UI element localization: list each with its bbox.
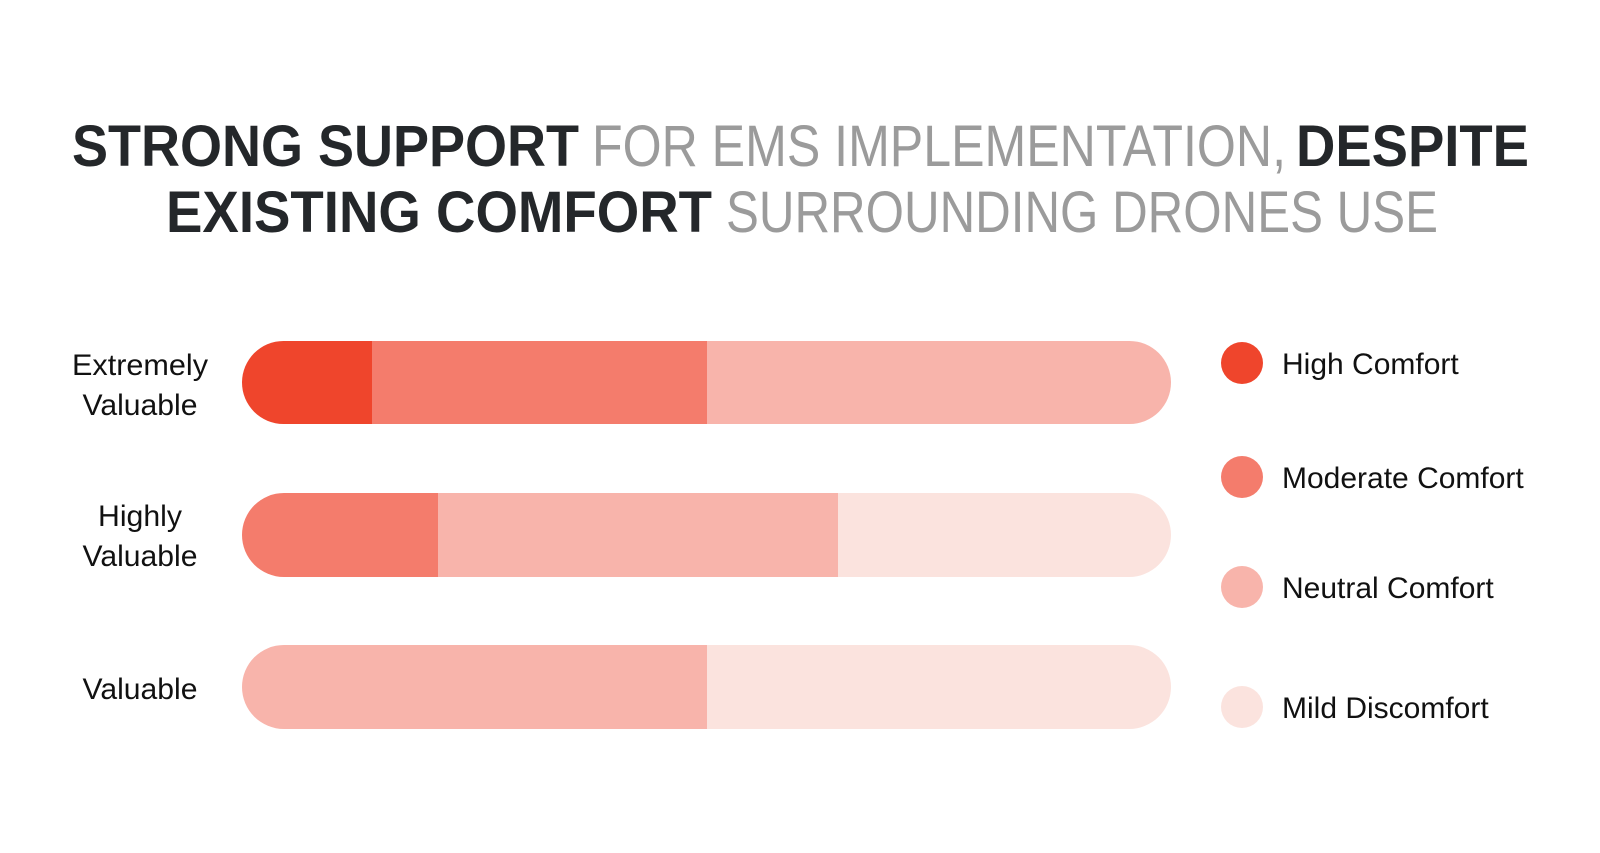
title: EXISTING COMFORT xyxy=(166,180,712,245)
label: Highly Valuable: Highly xyxy=(98,500,182,533)
legend: High Comfort xyxy=(1221,342,1459,384)
label: Highly Valuable: Valuable xyxy=(82,540,198,573)
bar: Highly Valuable xyxy=(242,493,1173,577)
legend: Neutral Comfort xyxy=(1221,566,1494,608)
legend: Mild Discomfort xyxy=(1221,686,1489,728)
legend: Moderate Comfort xyxy=(1221,456,1524,498)
label: Extremely Valuable: Valuable xyxy=(82,389,198,422)
bar: Valuable xyxy=(242,645,1173,729)
bar: Extremely Valuable xyxy=(242,341,1173,424)
title: SURROUNDING DRONES USE xyxy=(726,180,1438,245)
legend: Mild Discomfort: Mild Discomfort xyxy=(1282,692,1489,725)
legend: Neutral Comfort: Neutral Comfort xyxy=(1282,572,1494,605)
label: Extremely Valuable: Extremely xyxy=(72,349,208,382)
title xyxy=(72,114,1529,245)
legend xyxy=(1221,342,1524,728)
label: Valuable: Valuable xyxy=(82,673,198,706)
legend: High Comfort: High Comfort xyxy=(1282,348,1459,381)
legend: Moderate Comfort: Moderate Comfort xyxy=(1282,462,1524,495)
title: STRONG SUPPORT xyxy=(72,114,579,179)
title: DESPITE xyxy=(1296,114,1529,179)
title: FOR EMS IMPLEMENTATION, xyxy=(592,114,1286,179)
